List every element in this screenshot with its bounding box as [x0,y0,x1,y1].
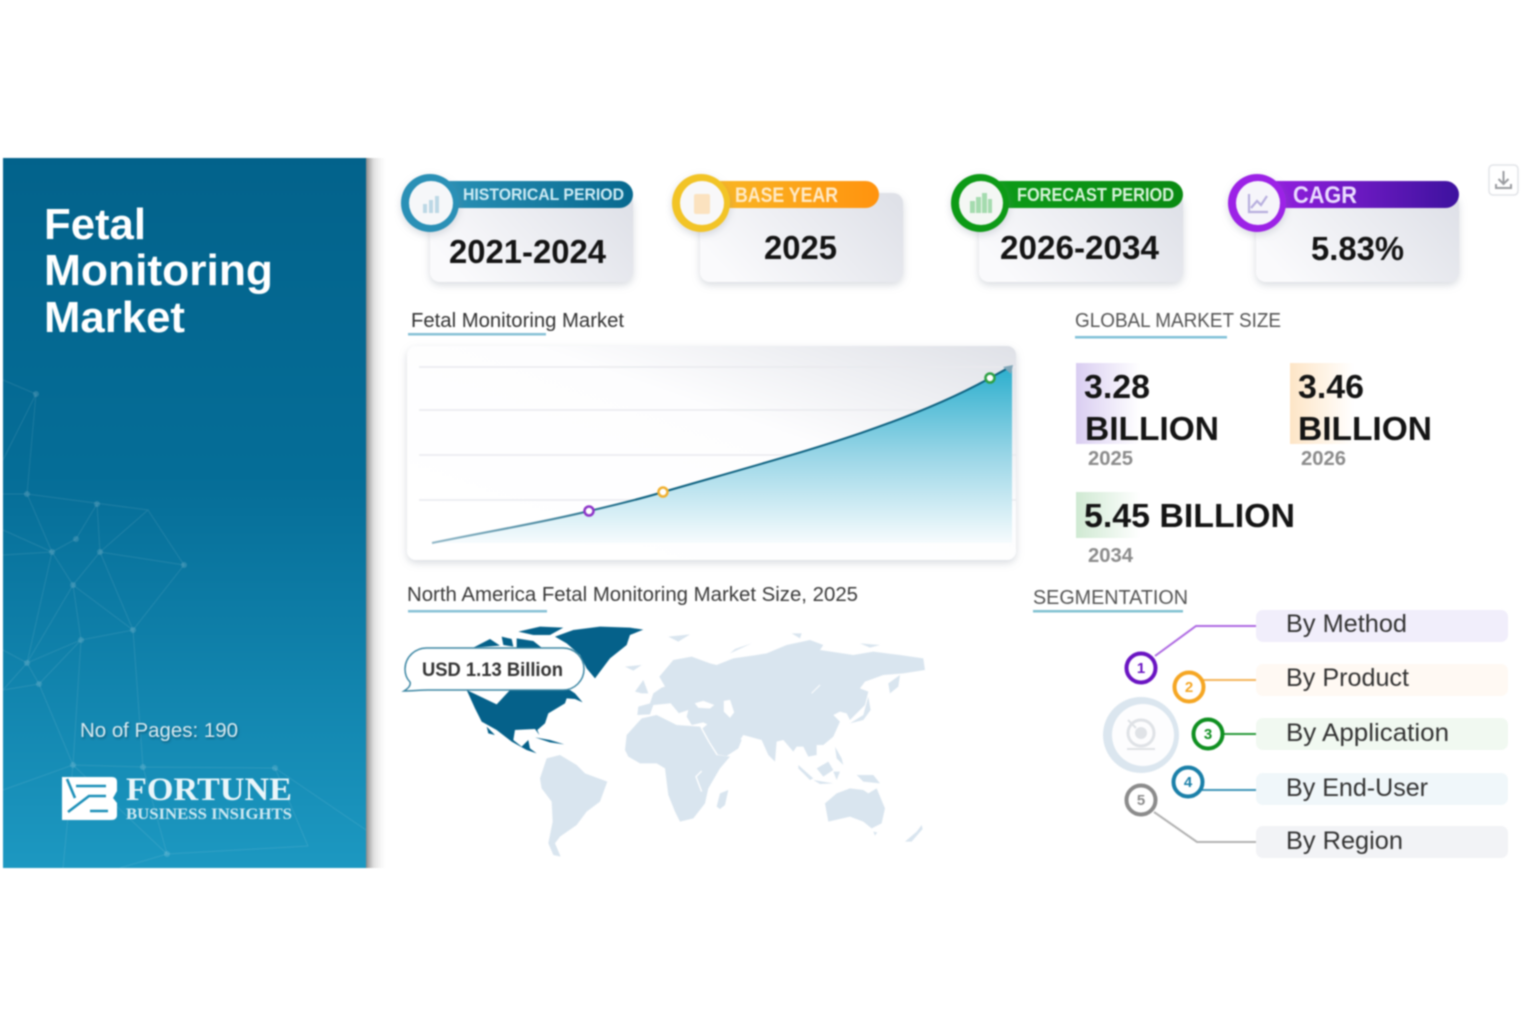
market value 2025: 2025 [1088,448,1133,470]
stat card: base year: BASE YEAR [735,184,838,207]
curve area [432,366,1012,543]
stat card: forecast period: 2026-2034 [1000,229,1160,266]
segment 4: by end-user: By End-User [1286,774,1428,802]
segment 1: by method [1126,610,1508,682]
stat card: CAGR: CAGR [1293,182,1357,209]
segmentation hub icon [1103,697,1179,773]
heading: Fetal Monitoring Market: Fetal Monitoring Market [411,310,624,332]
callout: USD 1.13 Billion: USD 1.13 Billion [422,660,563,681]
icon: line chart [1249,194,1268,212]
market value 2026: 2026 [1301,448,1346,470]
market value 2026 [1290,363,1432,470]
segment 3: by application: 3 [1204,726,1212,743]
market value 2025: BILLION [1085,410,1219,447]
segment 2: by product: 2 [1185,679,1193,696]
segment 4: by end-user: 4 [1184,774,1193,791]
data markers [584,374,994,516]
segment 1: by method: By Method [1286,610,1407,638]
market value 2034: 2034 [1088,545,1134,567]
network pattern [3,380,366,868]
world map [467,627,925,857]
segment 3: by application: By Application [1286,719,1449,747]
eastern hemisphere landmasses [625,633,925,842]
market value 2034: 5.45 BILLION [1084,497,1295,534]
left sidebar panel [3,158,386,868]
seas and lakes [670,685,820,792]
segment 1: by method: 1 [1137,660,1145,677]
heading: global market size: GLOBAL MARKET SIZE [1075,310,1281,332]
segment 5: by region: 5 [1137,792,1145,809]
stat card: historical period: HISTORICAL PERIOD [463,185,624,204]
stat card: base year: 2025 [764,229,837,266]
stat card: CAGR: 5.83% [1311,230,1404,267]
icon: growth chart [970,193,992,213]
heading: segmentation: SEGMENTATION [1033,587,1188,609]
title: Monitoring [44,246,273,295]
logo: Fortune Business Insights: BUSINESS INSIGHTS [126,806,292,823]
callout: USD 1.13 Billion [404,648,584,691]
stat card: forecast period: FORECAST PERIOD [1017,185,1174,205]
stat card: forecast period [951,174,1183,282]
segment 3: by application [1194,718,1508,750]
market value 2025: 3.28 [1084,368,1150,405]
page count: No of Pages: 190 [80,720,238,742]
heading: north america: North America Fetal Monitoring Market Size, 2025 [407,584,858,606]
segment 4: by end-user [1174,768,1508,805]
icon: bars [423,196,439,213]
segment 5: by region: By Region [1286,827,1403,855]
area chart [407,346,1016,560]
south america [540,755,607,857]
logo: Fortune Business Insights [62,772,292,823]
stat card: base year [672,174,903,282]
north america [467,627,643,753]
title: Fetal [44,200,146,249]
title: Market [44,293,185,342]
segment 2: by product [1174,664,1508,702]
segment 5: by region [1126,786,1508,858]
stat card: historical period [401,174,633,282]
market value 2025 [1076,363,1219,470]
market value 2026: 3.46 [1298,368,1364,405]
segment 2: by product: By Product [1286,664,1409,692]
icon: calendar [694,194,710,214]
arrow tip [1003,365,1013,374]
title [44,200,273,342]
stat card: historical period: 2021-2024 [449,233,607,270]
icon: download button [1489,165,1518,195]
market value 2034 [1076,492,1295,567]
logo: Fortune Business Insights: FORTUNE [126,772,292,808]
stat card: CAGR [1228,174,1459,282]
curve line [432,368,1008,543]
market value 2026: BILLION [1298,410,1432,447]
